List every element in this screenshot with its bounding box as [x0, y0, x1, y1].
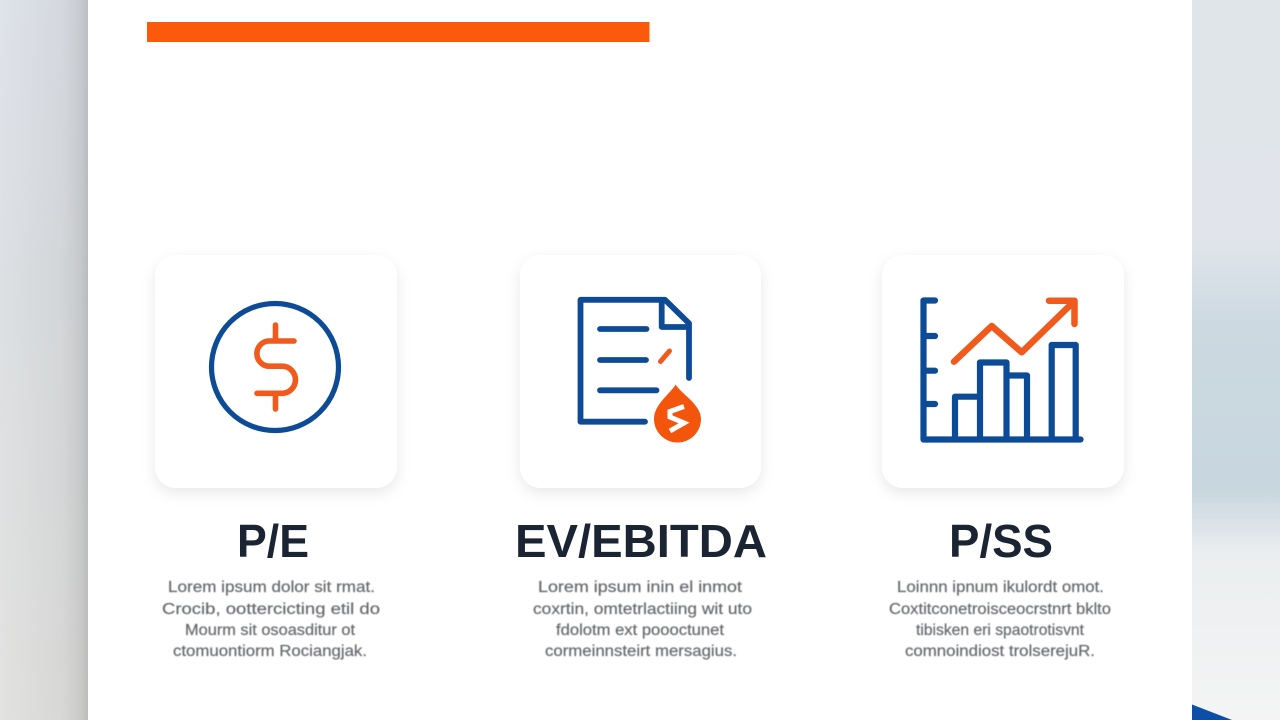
text block: P/E description	[162, 579, 380, 660]
text block: P/S description: comnoindiost trolserejuR.	[905, 643, 1095, 660]
text block: P/S description: Loinnn ipnum ikulordt omot.	[897, 579, 1104, 596]
icon: bar chart with rising arrow	[924, 300, 1080, 440]
text block: P/E description: ctomuontiorm Rociangjak.	[173, 643, 367, 660]
right background strip	[1192, 0, 1280, 720]
text block: EV/EBITDA description: coxrtin, omtetrlactiing wit uto	[533, 601, 752, 618]
panel: P/E	[155, 255, 397, 660]
text block: EV/EBITDA description: cormeinnsteirt mersagius.	[545, 643, 737, 660]
text block: P/S description: tibisken eri spaotrotisvnt	[916, 622, 1085, 639]
blue corner triangle	[1192, 704, 1232, 720]
text block: EV/EBITDA description: fdolotm ext poooctunet	[556, 622, 725, 639]
left background strip	[0, 0, 88, 720]
card: P/S	[882, 255, 1124, 488]
text block: P/E description: Crocib, oottercicting etil do	[162, 601, 380, 618]
heading: EV/EBITDA: EV/EBITDA	[515, 515, 767, 567]
text block: P/S description	[889, 579, 1111, 660]
orange title bar	[147, 22, 650, 42]
text block: EV/EBITDA description: Lorem ipsum inin el inmot	[538, 579, 743, 596]
text block: P/S description: Coxtitconetroisceocrstnrt bklto	[889, 601, 1111, 618]
panel: P/S	[882, 255, 1124, 660]
icon: dollar coin	[212, 304, 338, 430]
icon: document with dollar drop	[580, 300, 701, 442]
card: P/E	[155, 255, 397, 488]
heading: P/S: P/SS	[949, 515, 1053, 567]
text block: P/E description: Mourm sit osoasditur ot	[185, 622, 356, 639]
heading: P/E: P/E	[237, 515, 309, 567]
panel: EV/EBITDA	[515, 255, 767, 660]
text block: EV/EBITDA description	[533, 579, 752, 660]
card: EV/EBITDA	[520, 255, 761, 488]
text block: P/E description: Lorem ipsum dolor sit rmat.	[168, 579, 375, 596]
